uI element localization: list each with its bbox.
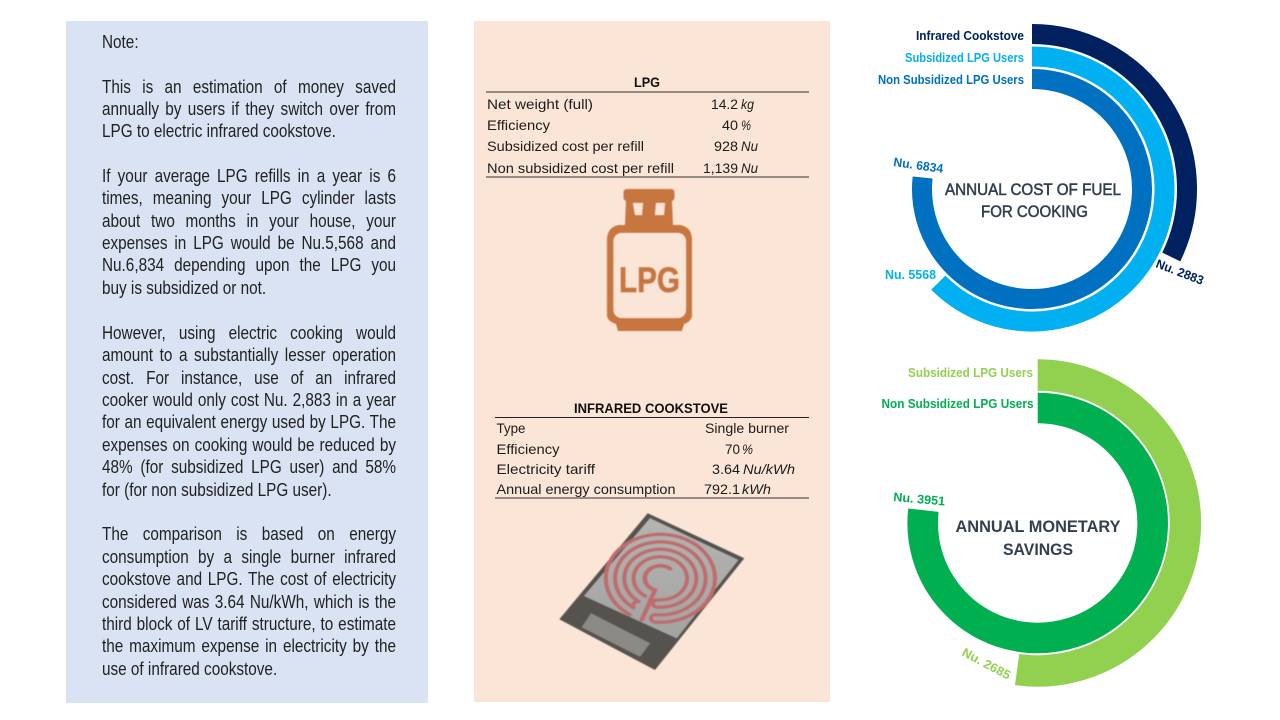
table: infrared cookstove: Single burner bbox=[705, 420, 789, 436]
value labels bbox=[885, 155, 1206, 288]
arc: non subsidized LPG users bbox=[923, 408, 1153, 638]
note heading: Note: bbox=[102, 32, 139, 52]
panel: note: expenses in LPG would be Nu.5,568 and bbox=[102, 233, 396, 253]
note paragraph: estimation bbox=[102, 77, 396, 141]
table: LPG: kg bbox=[741, 96, 754, 112]
table: infrared cookstove: 70 bbox=[725, 441, 740, 457]
icon: LPG cylinder: LPG bbox=[619, 261, 680, 300]
panel: note: third block of LV tariff structure, to estimate bbox=[102, 614, 396, 634]
panel: note: Nu.6,834 depending upon the LPG you bbox=[102, 255, 396, 275]
panel: note: use of infrared cookstove. bbox=[102, 659, 277, 679]
table: infrared cookstove: Efficiency bbox=[496, 441, 560, 457]
table: LPG: 1,139 bbox=[703, 160, 738, 176]
chart title bbox=[945, 180, 1121, 221]
panel: specifications bbox=[474, 21, 830, 702]
table: infrared cookstove bbox=[495, 400, 809, 498]
legend labels: Subsidized LPG Users bbox=[908, 366, 1033, 380]
table: infrared cookstove: kWh bbox=[742, 481, 771, 497]
panel: note: for (for non subsidized LPG user). bbox=[102, 480, 332, 500]
panel: note: However, using electric cooking would bbox=[102, 323, 396, 343]
panel: note: The comparison is based on energy bbox=[102, 524, 396, 544]
panel: note bbox=[66, 21, 428, 703]
table: infrared cookstove: INFRARED COOKSTOVE bbox=[574, 400, 728, 416]
table: LPG: Subsidized cost per refill bbox=[487, 138, 644, 154]
chart title: SAVINGS bbox=[1003, 540, 1073, 559]
chart: annual monetary savings bbox=[882, 366, 1185, 683]
legend labels: Subsidized LPG Users bbox=[905, 51, 1024, 65]
panel: note: for an equivalent energy used by LPG. The bbox=[102, 412, 396, 432]
value labels: Nu. 3951 bbox=[893, 490, 946, 509]
arc: subsidized LPG users bbox=[1017, 375, 1185, 671]
note paragraph: LPG expenses bbox=[102, 166, 396, 298]
heating coil bbox=[606, 534, 715, 622]
table: LPG bbox=[486, 74, 809, 177]
chart: annual cost of fuel for cooking bbox=[878, 29, 1206, 322]
chart title: ANNUAL COST OF FUEL bbox=[945, 180, 1121, 199]
panel: note: times, meaning your LPG cylinder lasts bbox=[102, 188, 396, 208]
chart title bbox=[956, 517, 1121, 559]
legend labels bbox=[878, 29, 1024, 87]
table: infrared cookstove: Type bbox=[496, 420, 526, 436]
panel: note: LPG to electric infrared cookstove. bbox=[102, 121, 336, 141]
panel: note: the maximum expense in electricity by the bbox=[102, 636, 396, 656]
panel: note: buy is subsidized or not. bbox=[102, 278, 266, 298]
panel: note: cookstove and LPG. The cost of electricity bbox=[102, 569, 396, 589]
table: LPG: 14.2 bbox=[711, 96, 738, 112]
value labels: Nu. 6834 bbox=[893, 155, 944, 176]
panel: note: If your average LPG refills in a year is 6 bbox=[102, 166, 396, 186]
table: LPG: % bbox=[741, 117, 751, 133]
panel: note: about two months in your house, your bbox=[102, 211, 396, 231]
legend labels: Infrared Cookstove bbox=[916, 29, 1024, 43]
value labels: Nu. 2883 bbox=[1154, 257, 1206, 288]
panel: note: expenses on cooking would be reduced by bbox=[102, 435, 396, 455]
table: LPG: Net weight (full) bbox=[487, 96, 593, 112]
table: LPG: 40 bbox=[722, 117, 738, 133]
panel: note: 48% (for subsidized LPG user) and 58% bbox=[102, 457, 396, 477]
chart title: FOR COOKING bbox=[981, 202, 1088, 221]
table: infrared cookstove: 3.64 bbox=[712, 461, 740, 477]
table: infrared cookstove: % bbox=[742, 441, 753, 457]
table: infrared cookstove: Nu/kWh bbox=[743, 461, 795, 477]
value labels: Nu. 2685 bbox=[960, 645, 1013, 683]
table: LPG: 928 bbox=[714, 138, 738, 154]
note paragraph: comparison basis bbox=[102, 524, 396, 679]
table: LPG: Nu bbox=[741, 160, 758, 176]
panel: note: amount to a substantially lesser operation bbox=[102, 345, 396, 365]
table: infrared cookstove: Electricity tariff bbox=[496, 461, 595, 477]
panel: note: cooker would only cost Nu. 2,883 in a year bbox=[102, 390, 396, 410]
legend labels: Non Subsidized LPG Users bbox=[882, 397, 1034, 411]
table: infrared cookstove: Annual energy consumption bbox=[496, 481, 676, 497]
legend labels: Non Subsidized LPG Users bbox=[878, 73, 1024, 87]
panel: note: This is an estimation of money saved bbox=[102, 77, 396, 97]
arc: non subsidized LPG users bbox=[922, 79, 1142, 299]
arc: subsidized LPG users bbox=[938, 56, 1164, 322]
table: LPG: Nu bbox=[741, 138, 758, 154]
value labels: Nu. 5568 bbox=[885, 268, 936, 282]
value labels bbox=[893, 490, 1013, 683]
panel: note: consumption by a single burner infrared bbox=[102, 547, 396, 567]
arc: infrared cookstove bbox=[1032, 34, 1187, 257]
icon: LPG cylinder bbox=[607, 189, 692, 331]
panel: note: considered was 3.64 Nu/kWh, which is the bbox=[102, 592, 396, 612]
table: LPG: Non subsidized cost per refill bbox=[487, 160, 674, 176]
chart title: ANNUAL MONETARY bbox=[956, 517, 1121, 536]
legend labels bbox=[882, 366, 1034, 411]
panel: note: cost. For instance, use of an infrared bbox=[102, 368, 396, 388]
table: LPG: LPG bbox=[634, 74, 660, 90]
panel: note: annually by users if they switch over from bbox=[102, 99, 396, 119]
table: LPG: Efficiency bbox=[487, 117, 550, 133]
table: infrared cookstove: 792.1 bbox=[704, 481, 740, 497]
icon: infrared cookstove bbox=[559, 513, 744, 670]
note paragraph: electric cooking savings bbox=[102, 323, 396, 500]
